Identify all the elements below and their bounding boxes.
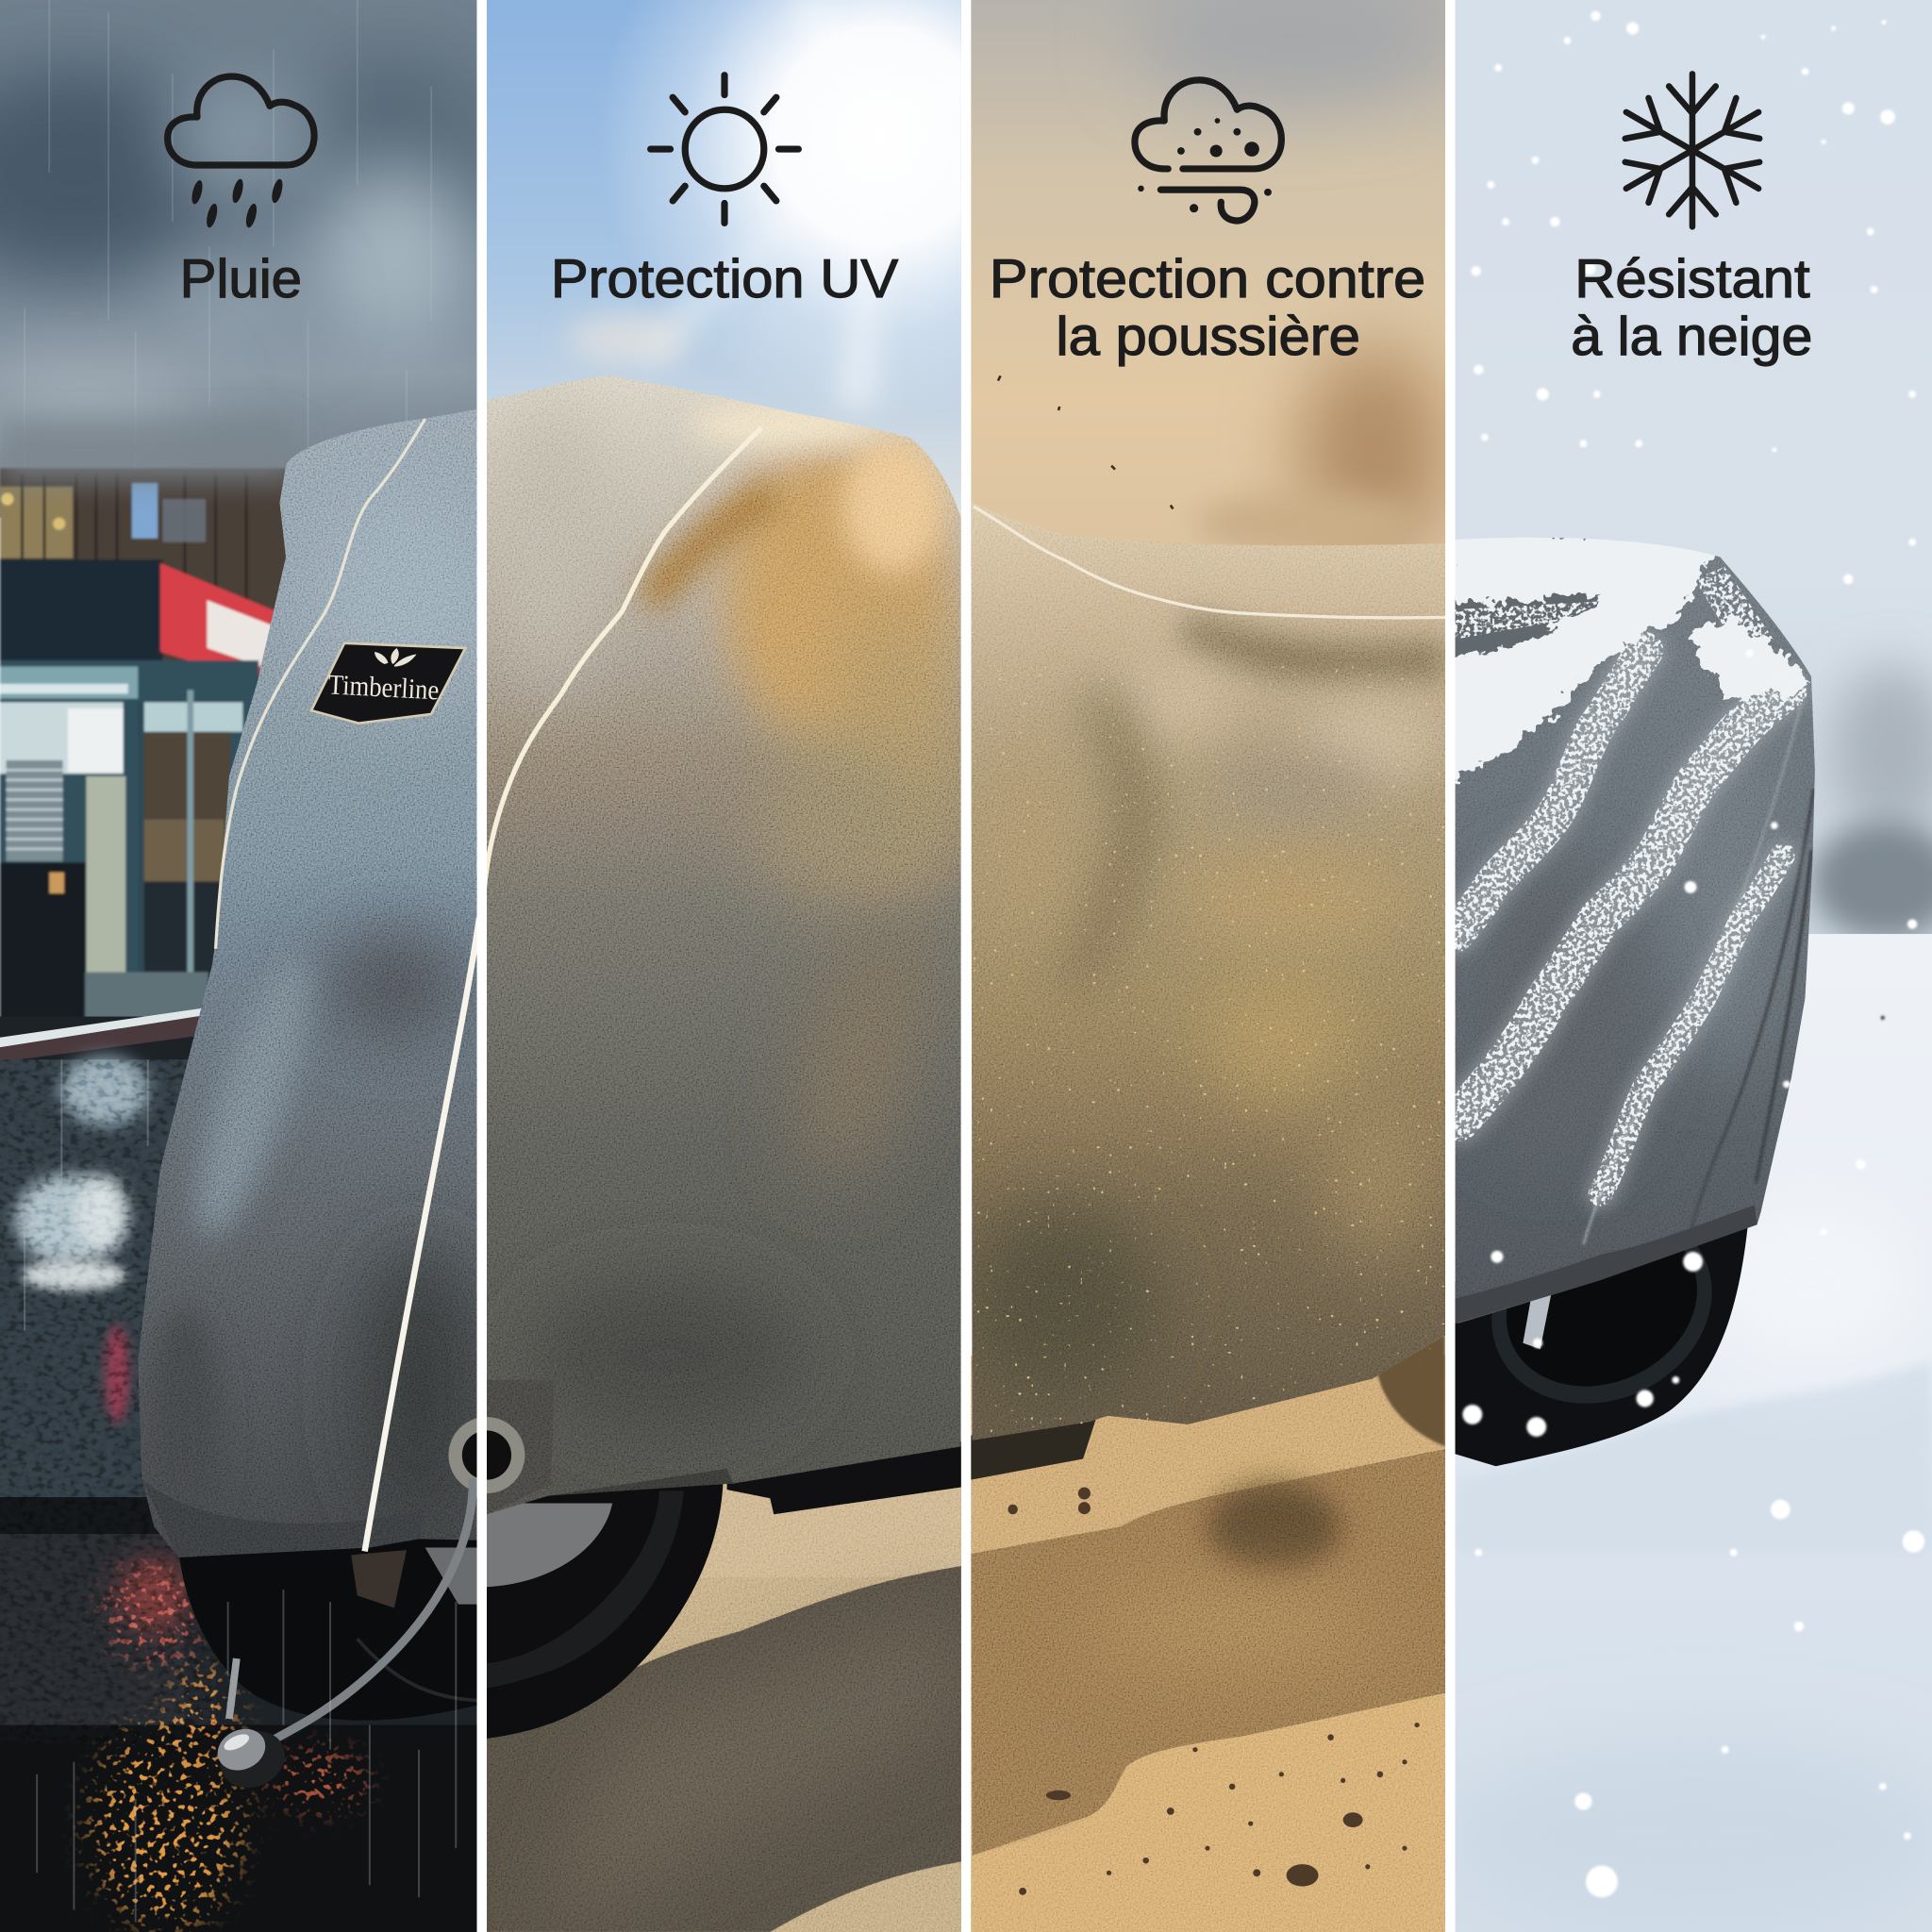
panel: snow [1436,0,1932,1932]
cover: UV section [487,370,961,1528]
heading: Résistant à la neige [1571,249,1812,367]
stormy sky [0,0,480,518]
pebbles on sand [1008,1487,1420,1895]
puddle highlights [90,1565,367,1928]
soft frost under streaks [1456,651,1787,1194]
icon: rain cloud [168,76,314,228]
dust specks on fabric [974,665,1445,1436]
heading: Protection UV: Protection UV [551,249,899,309]
rain streaks [25,1059,456,1923]
sunny sky [487,0,974,555]
heading: Protection contre la poussière [990,249,1425,367]
snow streaks [1456,651,1787,1194]
dusty sky [971,0,1454,567]
snow cap on top [1448,530,1811,782]
underside frame [971,1417,1096,1480]
cover: dust section [961,499,1445,1448]
reflective stripe: upper seam [216,419,425,949]
icon: sun [651,75,798,223]
grey gap in snow [1448,599,1602,659]
tyre and wheel [178,1528,476,1721]
panel: dust [961,0,1454,1932]
heading: Protection contre la poussière: Protection contre [990,249,1425,309]
heading: Résistant à la neige: à la neige [1571,307,1812,367]
tyre and wheel [1456,1174,1748,1466]
city street background [0,419,295,1055]
reflective stripe: lower seam [365,918,479,1551]
cover folds [1583,702,1814,1244]
cover: snow section [1448,530,1824,1325]
panel: rain [0,0,525,1932]
heading: Pluie: Pluie [180,249,302,309]
motorcycle tyre and brake disc [487,1478,724,1739]
snowy ground [1436,934,1932,1932]
sand ground with shadow [487,1441,961,1932]
reflective stripe [482,427,761,912]
cover seam [974,507,1445,618]
heading: Protection contre la poussière: la poussière [1056,307,1360,367]
icon: snowflake [1614,74,1770,226]
winter sky and trees [1456,0,1932,949]
grommet eyelet [448,1417,525,1493]
grommet eyelet [448,1417,525,1493]
icon: dust cloud and wind [1135,80,1281,221]
cover: rain section [138,409,477,1557]
wet road with reflections [0,1008,476,1932]
badge: Timberline logo: Timberline [327,669,440,706]
falling snowflakes [1462,11,1924,1897]
rear mudguard [1377,1336,1445,1446]
panel: UV [448,0,974,1932]
underside frame [727,1441,961,1514]
security cable and lock [210,1478,474,1798]
badge: Timberline logo [311,643,465,724]
desert ground [971,1356,1445,1932]
heading: Résistant à la neige: Résistant [1574,249,1810,309]
